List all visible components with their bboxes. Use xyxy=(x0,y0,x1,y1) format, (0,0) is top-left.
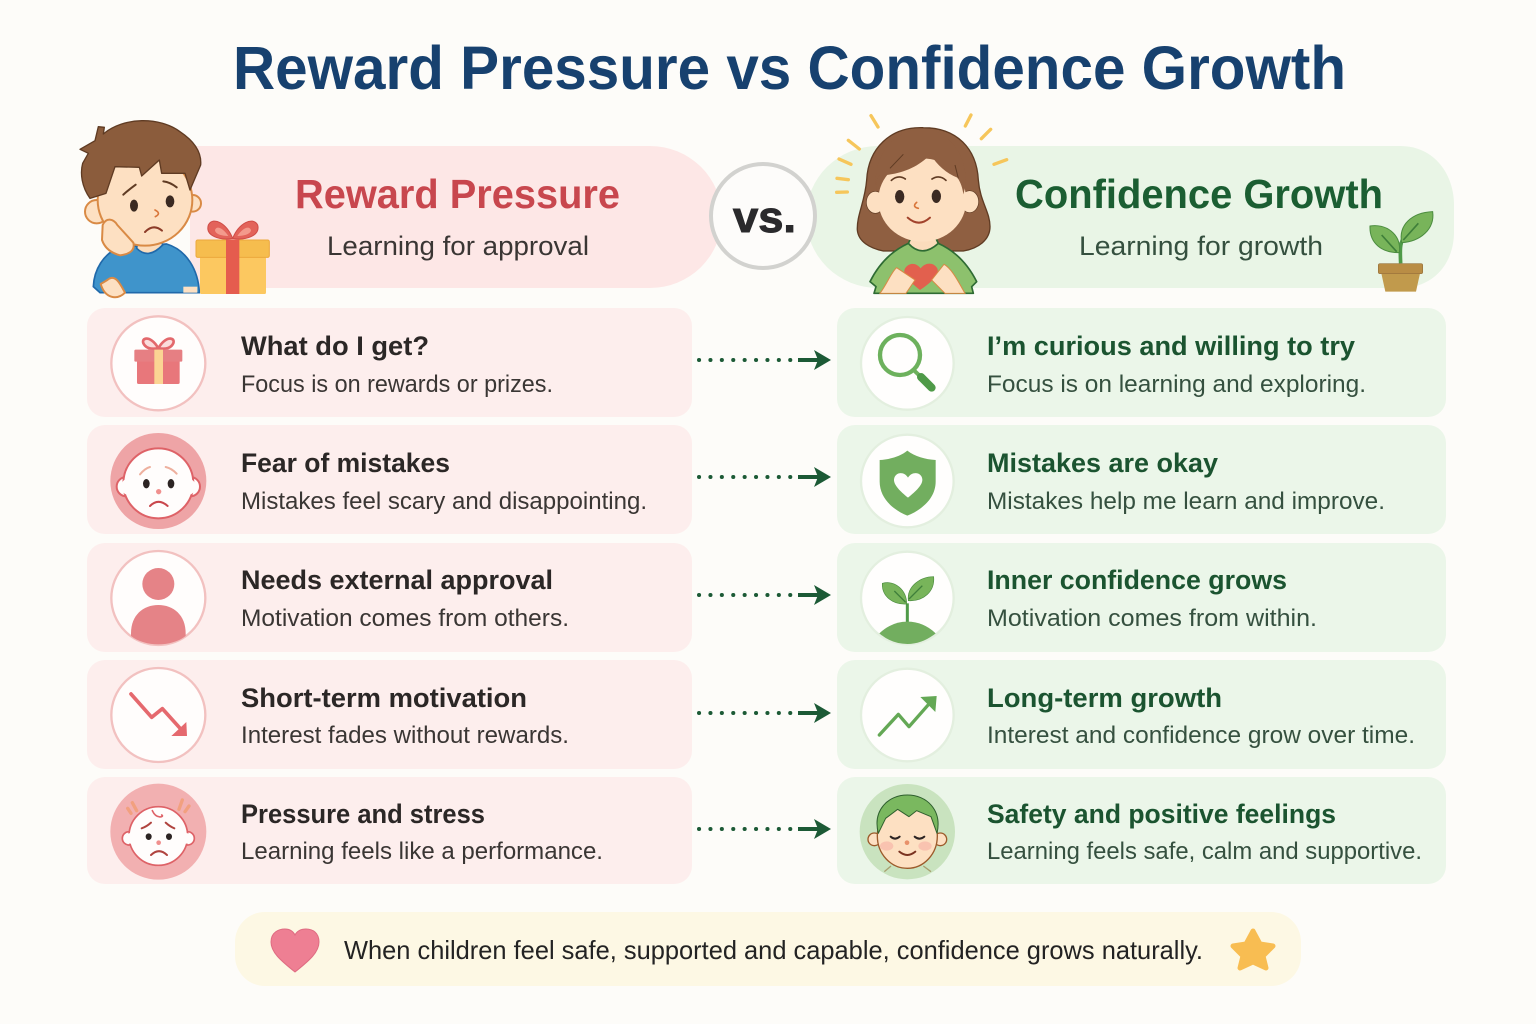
title: Reward Pressure vs Confidence Growth xyxy=(233,34,1346,102)
text: pressure and stress: Pressure and stress xyxy=(241,799,485,829)
text: needs external approval: Motivation comes from others. xyxy=(241,605,569,632)
icon: sprout xyxy=(861,552,954,644)
text: mistakes are okay: Mistakes help me learn and improve. xyxy=(987,488,1385,515)
illustration: worried boy with gift xyxy=(80,121,269,297)
icon: heart held by hands xyxy=(880,264,965,293)
icon: shine rays xyxy=(837,115,1007,192)
icon: gift xyxy=(111,316,205,410)
text: what do I get: Focus is on rewards or prizes. xyxy=(241,371,553,398)
heading: confidence growth: Confidence Growth xyxy=(1015,171,1383,217)
text: curious and willing: I’m curious and willing to try xyxy=(987,331,1355,361)
icon: scared face xyxy=(110,433,206,529)
text: short-term motivation: Interest fades without rewards. xyxy=(241,722,569,749)
row 5: growth card xyxy=(837,777,1446,884)
icon: falling trend arrow xyxy=(111,668,205,762)
text: mistakes are okay xyxy=(987,448,1385,515)
callout: bottom message xyxy=(235,912,1301,986)
icon: stressed face xyxy=(110,784,206,880)
text: short-term motivation xyxy=(241,683,569,749)
row 4: arrow xyxy=(699,703,831,723)
text: fear of mistakes xyxy=(241,448,647,515)
text: needs external approval: Needs external approval xyxy=(241,565,553,595)
text: short-term motivation: Short-term motivation xyxy=(241,683,527,713)
text: long-term growth xyxy=(987,683,1415,749)
vs badge: vs. xyxy=(733,193,796,242)
row 4: reward card xyxy=(87,660,692,769)
icon: star xyxy=(1233,931,1273,968)
icon: person xyxy=(111,551,205,645)
row 4: growth card xyxy=(837,660,1446,769)
text: inner confidence grows xyxy=(987,565,1317,632)
text: long-term growth: Long-term growth xyxy=(987,683,1222,713)
row 2: reward card xyxy=(87,425,692,534)
panel: reward pressure header xyxy=(190,146,722,288)
text: safety and positive feelings: Learning feels safe, calm and supportive. xyxy=(987,838,1422,865)
text: what do I get xyxy=(241,331,553,398)
row 5: arrow xyxy=(699,819,831,839)
subheading: learning for growth: Learning for growth xyxy=(1079,231,1323,261)
text: mistakes are okay: Mistakes are okay xyxy=(987,448,1218,478)
text: what do I get: What do I get? xyxy=(241,331,429,361)
row 1: arrow xyxy=(699,350,831,370)
icon: magnifying glass xyxy=(861,317,954,410)
icon: shield with heart xyxy=(861,435,954,527)
text: long-term growth: Interest and confidence grow over time. xyxy=(987,722,1415,749)
icon: rising trend arrow xyxy=(861,669,954,761)
message text: When children feel safe, supported and capable, confidence grows naturally. xyxy=(344,935,1203,965)
row 2: growth card xyxy=(837,425,1446,534)
text: inner confidence grows: Motivation comes from within. xyxy=(987,605,1317,632)
text: pressure and stress: Learning feels like a performance. xyxy=(241,838,603,865)
vs badge xyxy=(711,164,815,268)
row 2: arrow xyxy=(699,467,831,487)
row 1: reward card xyxy=(87,308,692,417)
text: curious and willing xyxy=(987,331,1366,398)
row 3: arrow xyxy=(699,585,831,605)
text: fear of mistakes: Fear of mistakes xyxy=(241,448,450,478)
text: curious and willing: Focus is on learning and exploring. xyxy=(987,371,1366,398)
text: fear of mistakes: Mistakes feel scary and disappointing. xyxy=(241,488,647,515)
heading: reward pressure: Reward Pressure xyxy=(295,171,620,217)
row 5: reward card xyxy=(87,777,692,884)
icon: heart xyxy=(271,929,319,972)
text: safety and positive feelings xyxy=(987,799,1422,865)
icon: calm child face xyxy=(860,784,955,879)
icon: gift box xyxy=(196,221,269,294)
row 3: growth card xyxy=(837,543,1446,652)
subheading: learning for approval: Learning for approval xyxy=(327,231,589,261)
row 1: growth card xyxy=(837,308,1446,417)
text: pressure and stress xyxy=(241,799,603,865)
text: needs external approval xyxy=(241,565,569,632)
text: safety and positive feelings: Safety and positive feelings xyxy=(987,799,1336,829)
panel: confidence growth header xyxy=(806,146,1454,288)
illustration: happy girl with heart xyxy=(837,115,1007,293)
text: inner confidence grows: Inner confidence grows xyxy=(987,565,1287,595)
icon: plant in pot xyxy=(1370,212,1433,292)
row 3: reward card xyxy=(87,543,692,652)
